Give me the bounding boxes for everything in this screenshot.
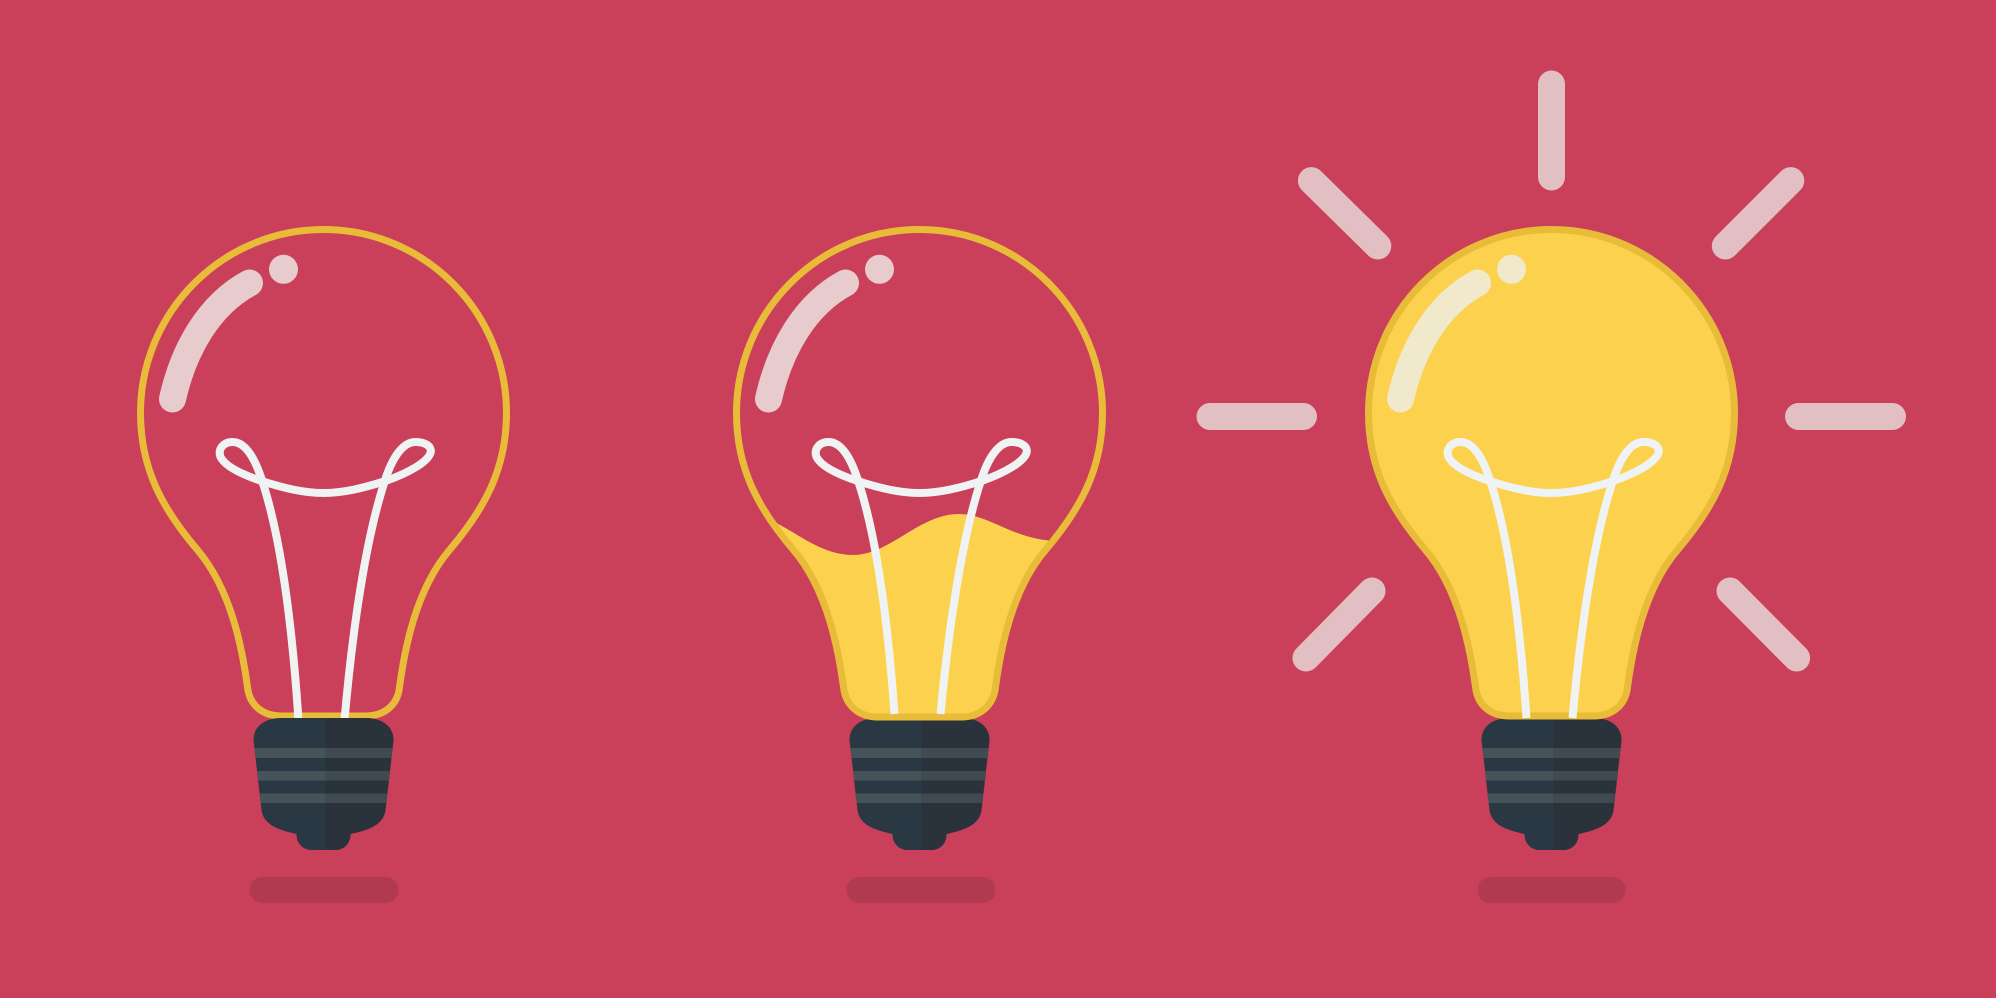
light rays around bulb 3 [1210, 84, 1892, 658]
screw base [254, 718, 394, 850]
glass highlight [768, 255, 894, 399]
filament [220, 442, 431, 720]
illustration: three light bulbs filling with light [137, 70, 1906, 903]
yellow light level [777, 514, 1049, 714]
glass highlight [1400, 255, 1526, 399]
glass highlight [172, 255, 298, 399]
glass filled with light [1368, 230, 1734, 716]
screw base [1482, 718, 1622, 850]
bulb 1: off, empty [140, 230, 506, 903]
ground shadow [1478, 877, 1626, 903]
bulb 2: half filled [736, 230, 1102, 903]
filament [1448, 442, 1659, 718]
glass outline [736, 230, 1102, 717]
ground shadow [846, 877, 996, 903]
filament [816, 442, 1027, 714]
glass outline [140, 230, 506, 716]
bulb 3: fully lit [1368, 230, 1734, 903]
screw base [850, 719, 990, 850]
ground shadow [250, 877, 398, 903]
